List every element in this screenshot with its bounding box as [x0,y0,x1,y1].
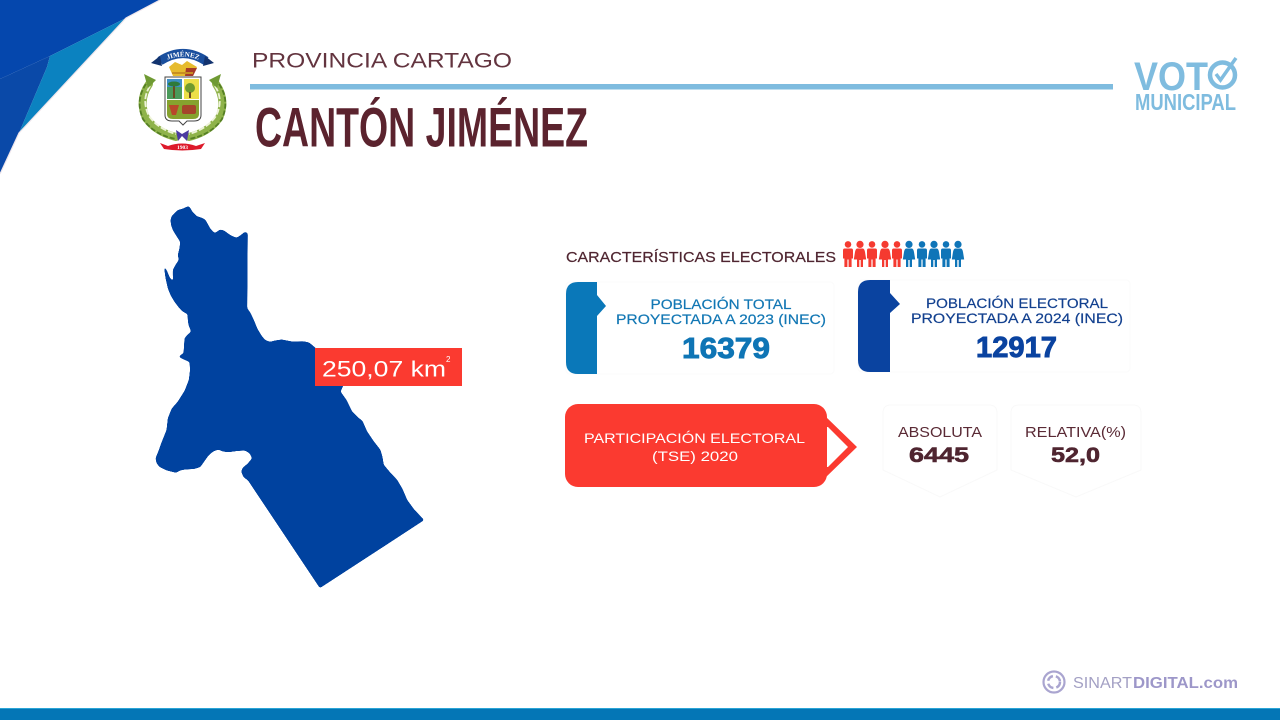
tab [858,280,900,372]
heading: electoral characteristics: CARACTERÍSTICAS ELECTORALES [566,249,836,266]
icon: coat of arms [138,48,226,151]
logo: Sinart Digital: DIGITAL.com [1133,675,1238,692]
panel: total population: PROYECTADA A 2023 (INEC) [616,311,826,327]
panel: electoral participation [565,404,857,487]
map: canton outline [156,207,424,587]
card: absolute [883,405,997,497]
title: CANTÓN JIMÉNEZ [255,96,588,158]
card: absolute: ABSOLUTA [898,424,982,441]
panel: electoral population [858,280,1130,372]
logo: Voto Municipal: MUNICIPAL [1135,89,1236,115]
card: relative: RELATIVA(%) [1025,424,1126,441]
heading: province: PROVINCIA CARTAGO [252,50,512,72]
card: relative [1011,405,1141,497]
card: relative: 52,0 [1051,444,1100,467]
logo: Voto Municipal: VOT [1134,55,1208,99]
panel: total population: 16379 [682,333,770,365]
arrow chevron [825,416,857,478]
tab [566,282,606,374]
top banner: JIMÉNEZ [167,50,200,60]
card: absolute: 6445 [909,444,969,467]
crown [169,61,197,76]
shield [165,77,201,125]
panel: electoral population: POBLACIÓN ELECTORAL [926,295,1108,311]
logo: Sinart Digital [1044,672,1238,692]
panel: electoral population: 12917 [976,332,1057,364]
panel: electoral population: PROYECTADA A 2024 (INEC) [911,310,1123,326]
callout: area: 250,07 km [322,356,446,382]
panel: electoral participation: PARTICIPACIÓN ELECTORAL [584,430,805,446]
bottom bar [0,708,1280,720]
icon: people row [843,241,964,267]
panel: electoral participation: (TSE) 2020 [652,448,738,464]
bottom banner: 1903 [177,145,188,151]
logo: Sinart Digital: SINART [1073,675,1133,692]
callout: area [315,348,462,386]
panel: total population: POBLACIÓN TOTAL [650,296,792,312]
logo: Voto Municipal [1134,55,1236,115]
header rule [250,84,1113,90]
ribbon [176,130,189,141]
corner decoration [0,0,160,174]
callout: area: 2 [446,355,451,364]
wreath [140,84,225,139]
panel: total population [566,282,834,374]
